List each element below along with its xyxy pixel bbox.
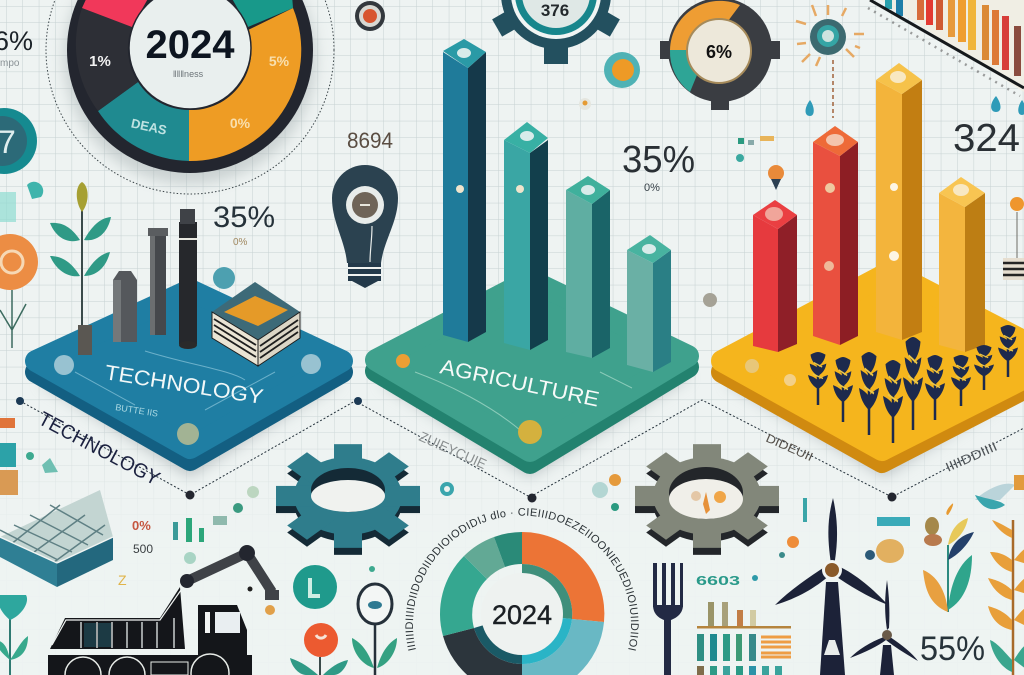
bar chart: teal bars xyxy=(443,39,671,372)
plant icon xyxy=(50,182,111,352)
red bar 1 xyxy=(753,200,797,352)
panel: agriculture platform xyxy=(376,280,690,477)
left stack of mini cards xyxy=(0,418,58,495)
teal bar 3 xyxy=(566,176,610,358)
battery box xyxy=(212,282,300,366)
bar chart: red and yellow bars xyxy=(753,63,985,352)
top donut chart 2024: DEAS xyxy=(130,116,168,138)
teal bar 2 xyxy=(504,122,548,350)
left orange flower xyxy=(0,234,38,348)
mini bar chart xyxy=(696,573,791,675)
wind turbines xyxy=(775,498,918,675)
orange wheat icon xyxy=(988,520,1024,675)
label: technology outside: TECHNOLOGY xyxy=(35,408,163,490)
small orange teal badge xyxy=(604,52,640,88)
stat 35% center: 0% xyxy=(644,182,660,194)
top right mini bar strip xyxy=(868,0,1024,96)
stat 8694: 8694 xyxy=(347,128,393,153)
dump truck xyxy=(48,545,279,675)
small red indicator xyxy=(355,1,385,31)
gear: olive gray xyxy=(635,444,779,555)
mini stats center-left xyxy=(118,486,259,588)
red bar 2 xyxy=(813,126,858,345)
platform title agriculture: AGRICULTURE xyxy=(438,355,601,412)
mini stats center-left: 0% xyxy=(132,518,151,533)
bottom donut chart 2024: IIIIIIDIIIIDIIDODIIDDIOIODIDIJ dlo · CIEIIIDOEZEIIOONIEUEDIIOIUIIDIIOIIIIII xyxy=(405,508,639,651)
platform title technology: TECHNOLOGY xyxy=(103,361,265,409)
left teal badge xyxy=(0,108,43,222)
mini bar chart: 6603 xyxy=(696,573,740,588)
gear: teal xyxy=(276,444,420,555)
bottom donut chart 2024 xyxy=(405,508,639,675)
top center gear: 376 xyxy=(541,1,569,20)
mini stats center-left: Z xyxy=(118,572,127,588)
chimney cylinders xyxy=(78,209,235,355)
donut center year: 2024 xyxy=(492,600,552,630)
stat 35% left: 35% xyxy=(213,201,275,234)
top center gear xyxy=(492,0,620,64)
small pin xyxy=(579,98,591,110)
top left percent label: mpo xyxy=(0,58,20,69)
water drops xyxy=(806,96,1024,116)
scattered mini icons center-right xyxy=(440,474,1024,581)
top donut chart 2024: 1% xyxy=(89,53,111,70)
bottom left teal leaf xyxy=(0,595,28,675)
stat 324 right: 324 xyxy=(953,117,1020,160)
stat 35% left: 0% xyxy=(233,237,248,248)
magnifier plant xyxy=(352,584,397,675)
teal badge and plants bottom center-left xyxy=(290,565,375,675)
label: yellow platform outside right: IIIIDDIIII xyxy=(943,439,999,475)
top donut chart 2024: 5% xyxy=(269,53,290,69)
right edge orange marker and battery xyxy=(1003,197,1024,280)
label: yellow platform outside left: DIDEUII xyxy=(764,431,815,464)
top left percent label xyxy=(0,26,33,69)
mesh box xyxy=(0,490,113,587)
leaf plant icon xyxy=(923,503,974,612)
top right gear: 6% xyxy=(706,42,732,62)
small legend icons right of center xyxy=(703,136,784,307)
panel: technology platform xyxy=(36,290,342,477)
donut center year: 2024 xyxy=(146,23,235,67)
stat 35% left xyxy=(213,201,275,248)
sun icon xyxy=(796,5,864,118)
panel: yellow platform xyxy=(722,272,1024,477)
yellow bar tall xyxy=(876,63,922,340)
yellow bar short xyxy=(939,177,985,352)
top donut chart 2024 xyxy=(46,0,334,194)
crane arm xyxy=(180,545,279,615)
top donut chart 2024: 0% xyxy=(230,115,251,131)
sprout rows on yellow platform xyxy=(745,325,1018,443)
dotted connector lines xyxy=(16,397,1024,502)
top right gear xyxy=(660,0,780,110)
label: agriculture outside: ZUIEYCUIE xyxy=(417,428,489,472)
top donut chart 2024: ǁǁǁness xyxy=(173,69,204,79)
fork icon xyxy=(653,563,683,675)
panel: technology platform: BUTTE IIS xyxy=(115,402,159,419)
stat 35% center: 35% xyxy=(622,139,695,181)
mini stats center-left: 500 xyxy=(133,542,153,556)
lightbulb icon xyxy=(332,165,398,288)
teal bar 4 xyxy=(627,235,671,372)
stat 55%: 55% xyxy=(920,630,985,668)
teal bar 1 xyxy=(443,39,486,342)
